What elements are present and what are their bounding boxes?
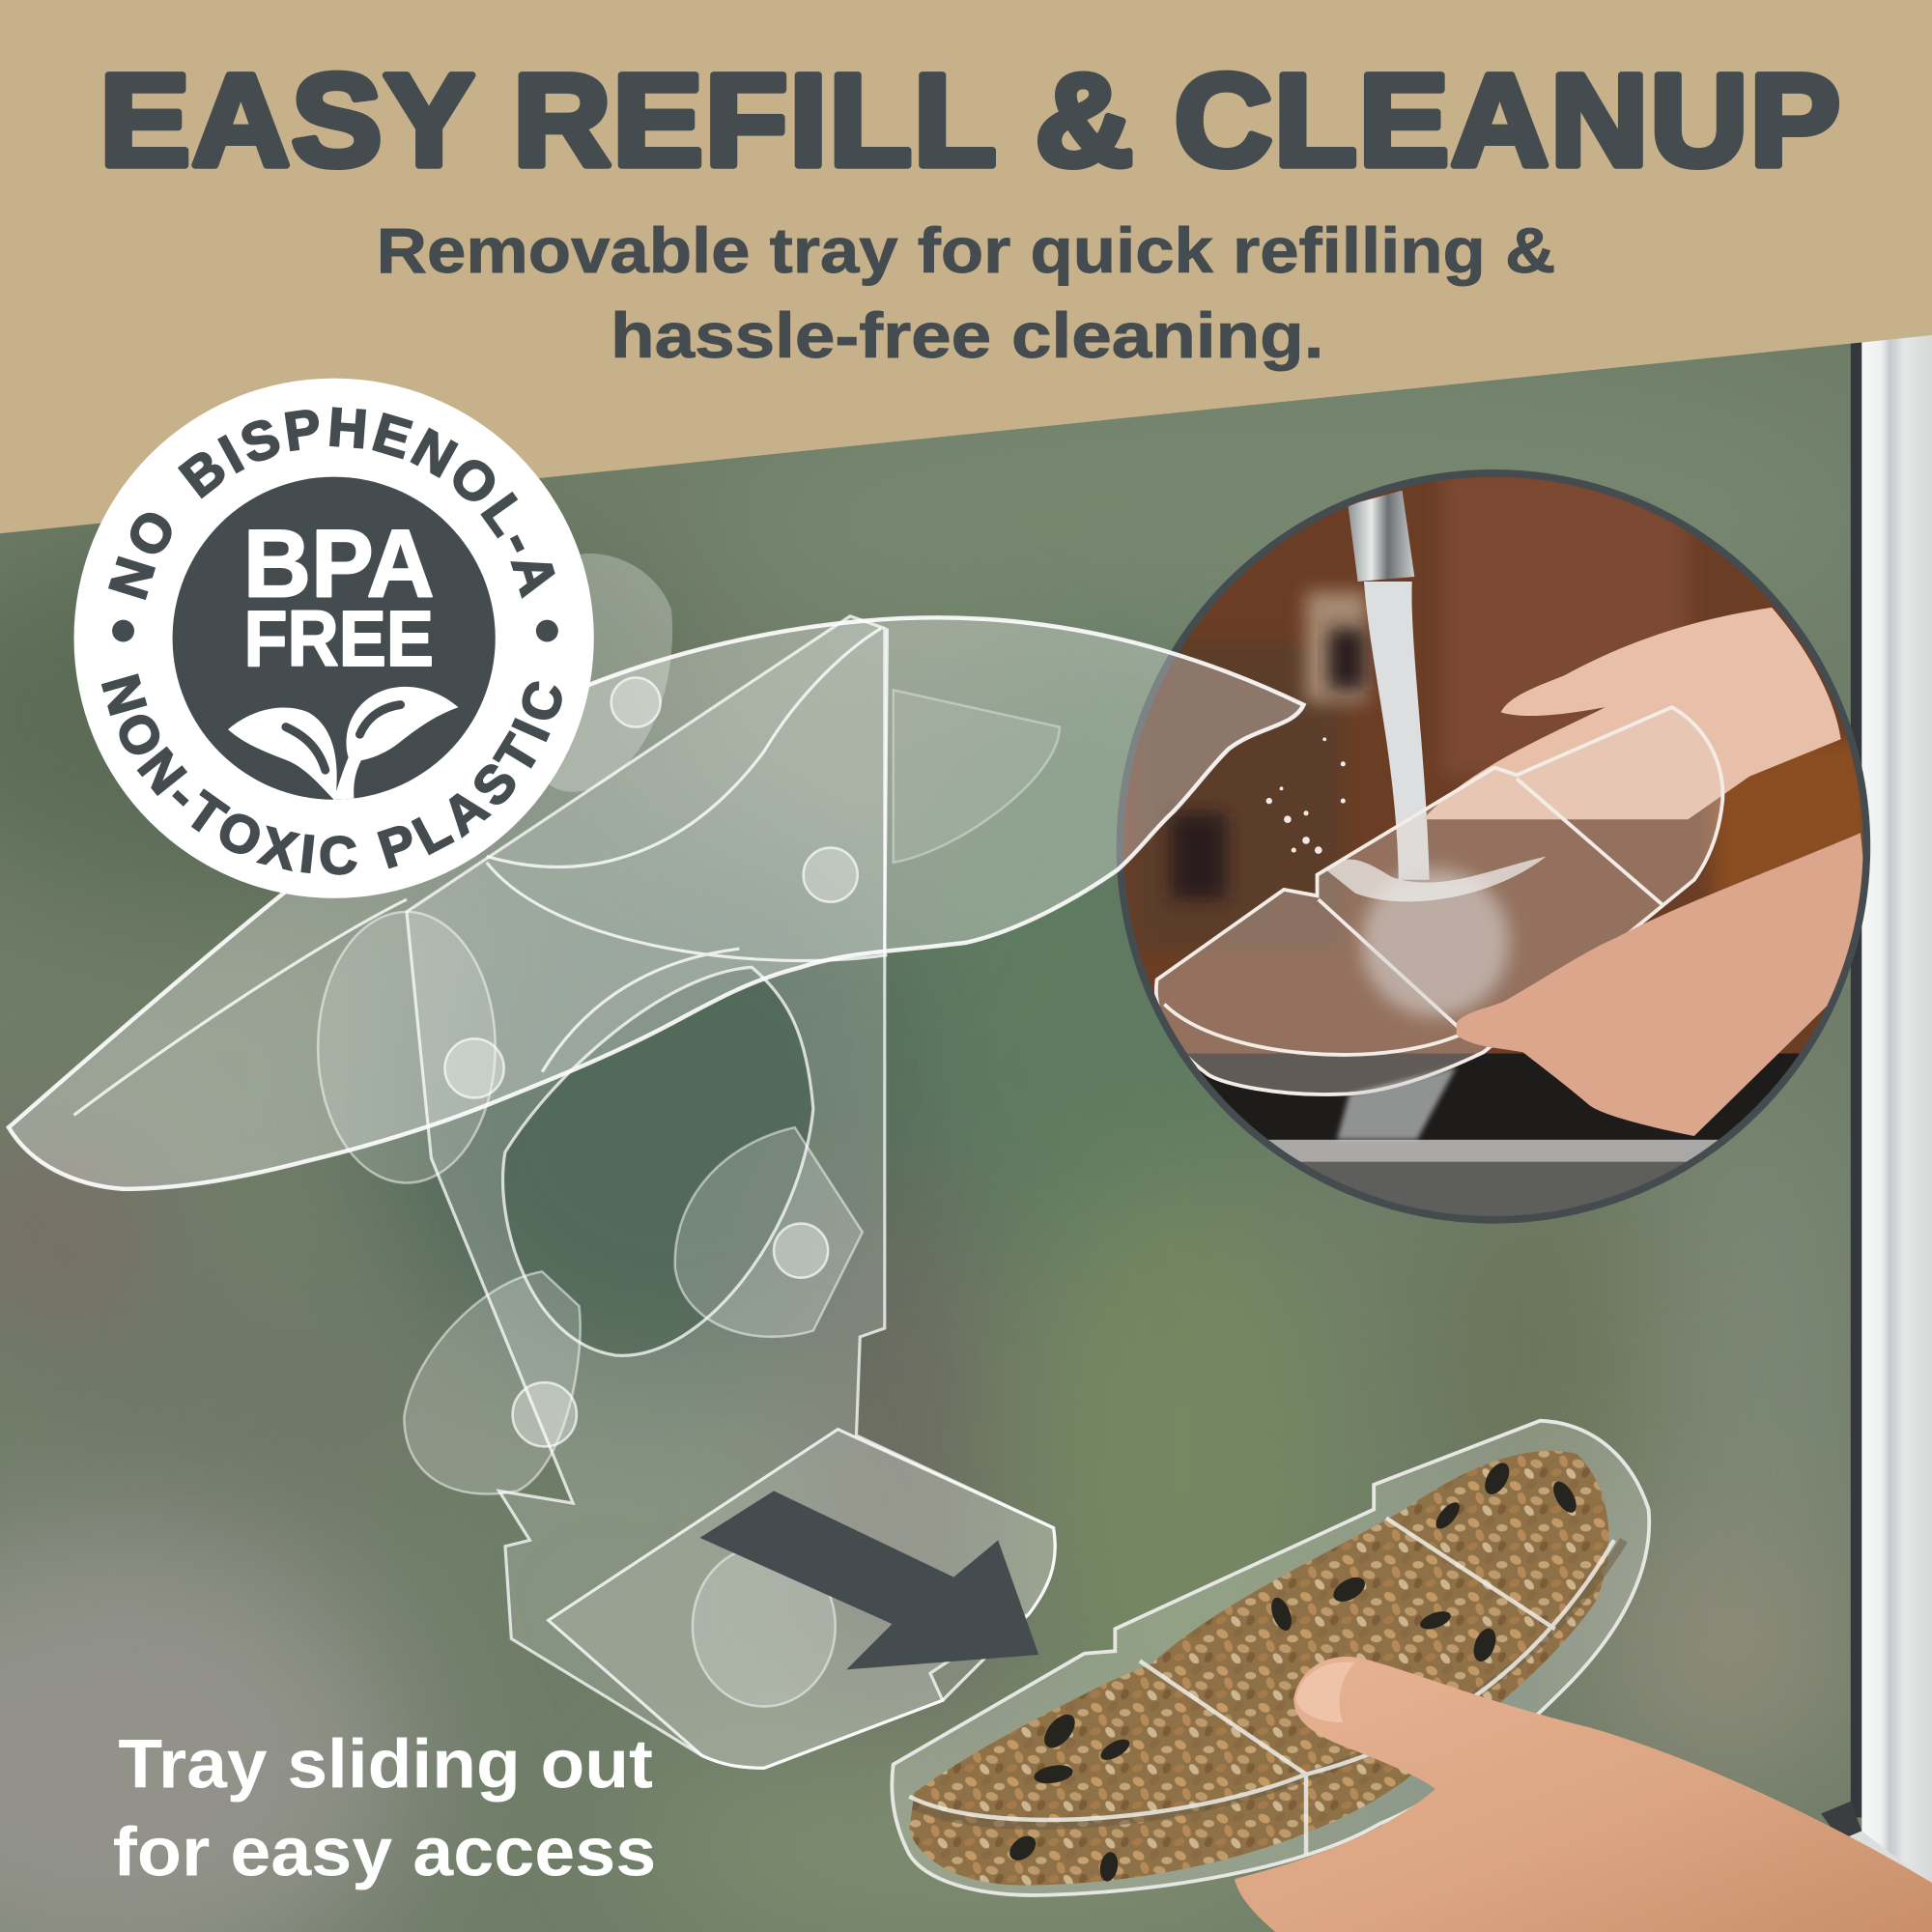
thumbnail (1296, 1662, 1355, 1722)
kitchen background (1109, 469, 1873, 1233)
icon: leaf sprout (228, 686, 458, 800)
BPA free badge (73, 379, 594, 898)
seed tray (892, 1421, 1649, 1895)
tray slot floor (549, 1430, 1055, 1768)
water splash and runoff (1266, 737, 1547, 1140)
ring text bottom: NON-TOXIC PLASTIC (100, 673, 562, 875)
tray being washed (1156, 707, 1722, 1094)
window frame (1821, 332, 1932, 1932)
badge text: BPA: BPA (243, 510, 435, 617)
ring dots (112, 620, 558, 642)
transparent acrylic window feeder (9, 554, 1303, 1768)
roof ridge and fold (74, 629, 887, 1115)
rear suction cups (318, 554, 863, 1707)
tray dividers and rim (909, 1518, 1614, 1855)
seed mix (909, 1451, 1608, 1886)
hand holding tray (1235, 1657, 1932, 1932)
lower hand (1457, 833, 1873, 1136)
top banner (0, 0, 1932, 533)
dark seeds (1005, 1459, 1581, 1883)
badge text: FREE: FREE (244, 595, 434, 683)
subtitle: Removable tray for quick refilling & (377, 215, 1555, 287)
faucet (1348, 491, 1414, 582)
title: EASY REFILL & CLEANUP (99, 47, 1842, 193)
water stream (1364, 582, 1430, 880)
roof (9, 617, 1303, 1189)
caption (113, 1726, 656, 1890)
arrow (699, 1491, 1038, 1669)
circular photo: washing the tray (1109, 469, 1873, 1233)
subtitle (377, 215, 1555, 372)
tray rim band (914, 1540, 1624, 1826)
subtitle: hassle-free cleaning. (611, 300, 1324, 372)
upper hand (1423, 608, 1841, 819)
back plate with circular opening (407, 616, 1055, 1768)
caption: for easy access (113, 1813, 656, 1890)
ring text top: NO BISPHENOL-A (108, 407, 555, 601)
caption: Tray sliding out (118, 1726, 653, 1804)
